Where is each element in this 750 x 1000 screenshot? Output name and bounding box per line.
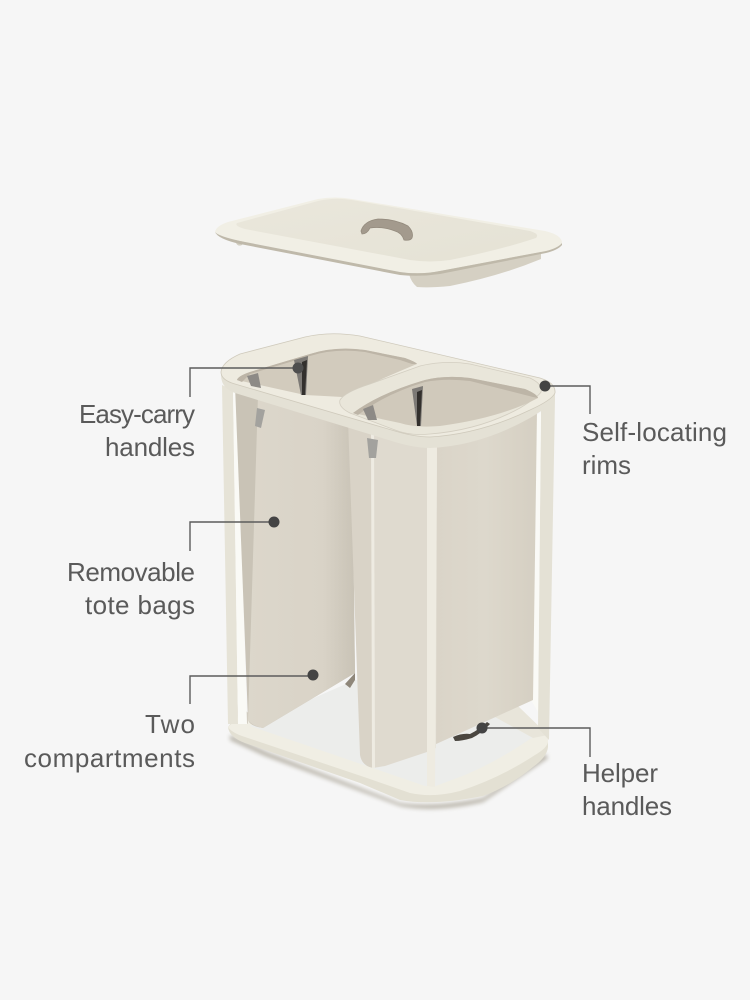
back posts <box>538 398 555 740</box>
callout dot: two compartments <box>308 670 318 680</box>
right opening <box>353 377 538 427</box>
callout dot: easy-carry handles <box>292 362 304 374</box>
right bag tab <box>367 438 378 458</box>
label: easy-carry handles: handles <box>105 432 195 462</box>
label: helper handles <box>582 758 672 821</box>
label: removable tote bags: tote bags <box>85 590 195 620</box>
label: self-locating rims <box>582 417 727 480</box>
label: easy-carry handles <box>79 399 195 462</box>
centre post <box>427 440 437 787</box>
label: two compartments: compartments <box>24 743 195 773</box>
left opening <box>237 349 417 397</box>
lid underside lip <box>409 252 541 287</box>
left bag tab <box>255 408 265 428</box>
back left corner <box>237 702 248 724</box>
easy-carry handle strap left <box>294 356 308 395</box>
callout dot: self-locating rims <box>540 380 550 392</box>
base front repeat <box>427 786 436 795</box>
label: self-locating rims: rims <box>582 450 631 480</box>
helper handle strap <box>453 722 490 741</box>
lid top surface <box>215 198 562 273</box>
lid peg <box>234 238 245 246</box>
lid inner panel <box>236 199 537 262</box>
handle strap hidden end <box>345 673 355 688</box>
left tote bag <box>235 385 355 728</box>
back right bar <box>495 706 548 738</box>
left post <box>222 385 238 724</box>
label: helper handles: Helper <box>582 758 658 788</box>
callout dot: removable tote bags <box>268 516 280 528</box>
base shadow <box>230 735 548 809</box>
right raised ring <box>340 362 541 434</box>
right tote bag <box>348 410 537 768</box>
label: removable tote bags <box>67 557 195 620</box>
floor <box>250 680 533 787</box>
top rim <box>221 334 555 448</box>
label: removable tote bags: Removable <box>67 557 195 587</box>
callout dot: helper handles <box>476 722 488 734</box>
lid <box>215 198 562 287</box>
hamper <box>221 334 555 802</box>
label: two compartments: Two <box>145 709 195 739</box>
label: self-locating rims: Self-locating <box>582 417 727 447</box>
label: two compartments <box>24 709 195 773</box>
callout lines <box>190 368 590 757</box>
label: helper handles: handles <box>582 791 672 821</box>
lid handle <box>361 219 412 240</box>
label: easy-carry handles: Easy-carry <box>79 399 195 429</box>
easy-carry handle strap right <box>412 386 423 426</box>
base ring <box>228 712 548 802</box>
